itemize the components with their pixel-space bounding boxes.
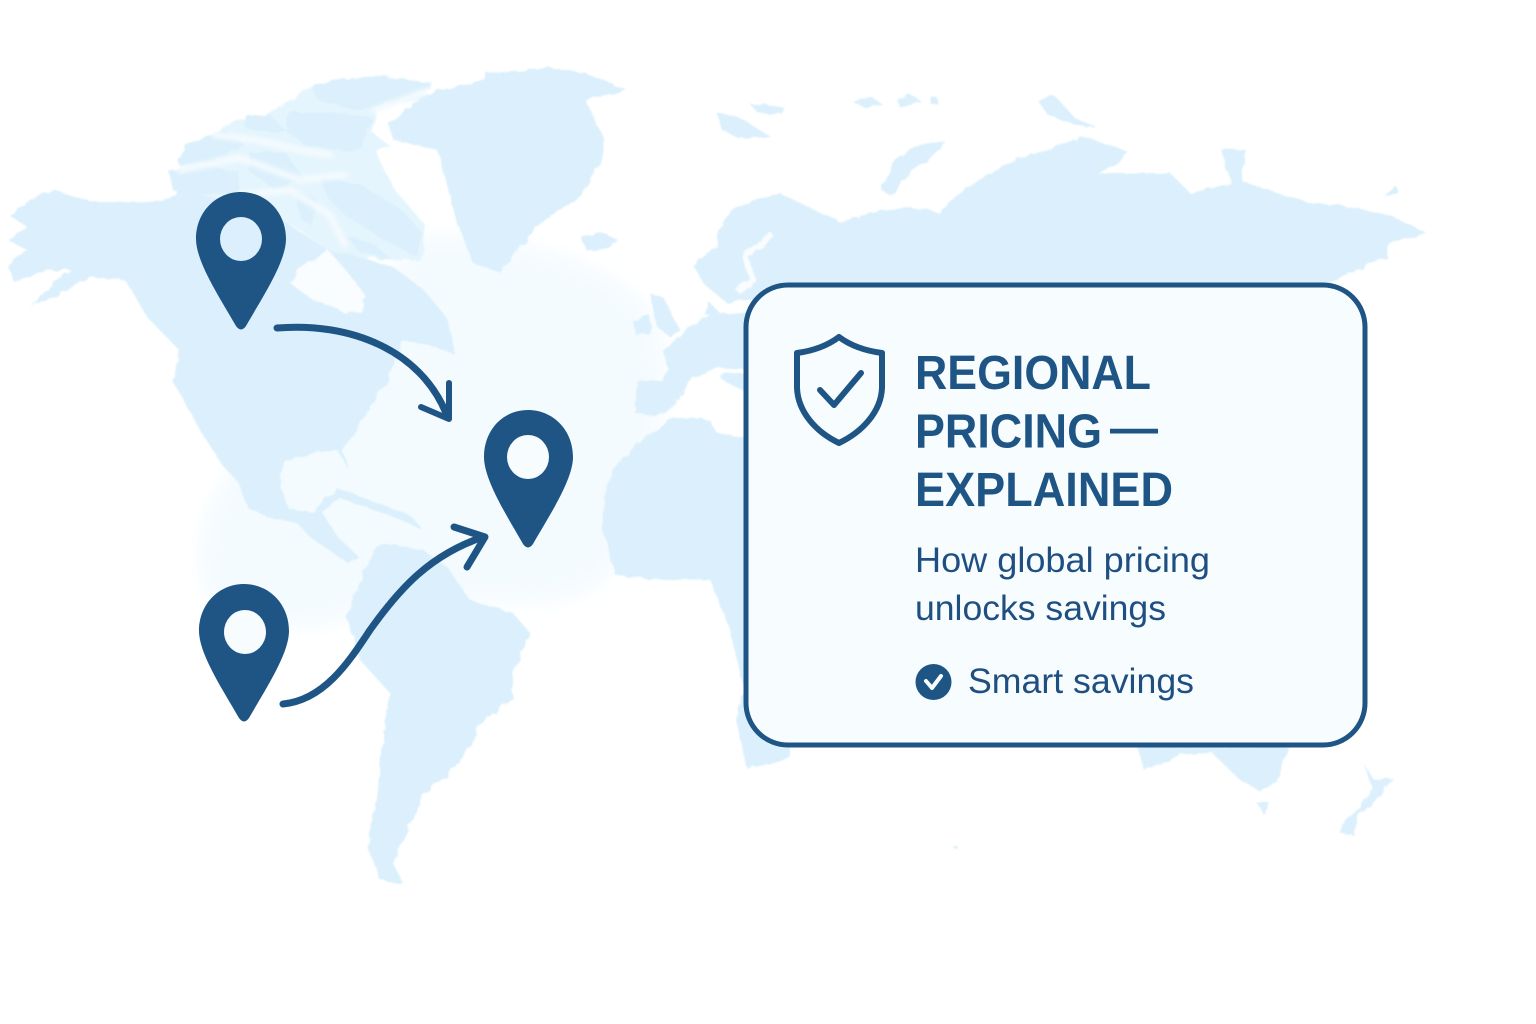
map: italy	[720, 372, 750, 394]
map: franz josef land	[853, 96, 883, 108]
heading: —	[1110, 402, 1158, 455]
heading: PRICING	[915, 406, 1102, 458]
subtitle	[915, 541, 1210, 628]
map: severnaya zemlya	[1037, 96, 1098, 128]
map: south america	[347, 543, 530, 883]
map: novaya zemlya	[881, 140, 945, 195]
map: new zealand	[1340, 763, 1394, 835]
pin: destination	[484, 410, 573, 548]
pin: south america	[199, 584, 289, 722]
map: great britain	[650, 293, 680, 337]
map: ireland	[633, 315, 650, 335]
badge: smart savings: Smart savings	[968, 662, 1194, 701]
arrow: north america to destination	[277, 327, 449, 419]
map: baltic cut	[738, 235, 773, 292]
heading	[915, 347, 1173, 517]
map: small speck	[952, 846, 958, 850]
map: continental europe	[635, 313, 750, 417]
map: greenland	[388, 68, 627, 273]
pin: north america	[196, 192, 286, 330]
icon: shield with check	[797, 337, 882, 443]
map: iceland	[582, 232, 618, 250]
map: arctic base	[172, 75, 433, 262]
map: eurasia	[692, 137, 1427, 303]
map: wrangel island	[1384, 186, 1400, 196]
panel: regional pricing card	[746, 285, 1365, 745]
atlantic glow	[200, 235, 665, 627]
map: africa	[602, 417, 790, 768]
map: arctic channels	[180, 92, 425, 245]
heading: REGIONAL	[915, 347, 1151, 400]
map: hudson bay cut	[290, 250, 366, 313]
subtitle: unlocks savings	[915, 589, 1166, 628]
map: arctic islands	[170, 77, 433, 260]
heading: EXPLAINED	[915, 464, 1173, 517]
map: denmark	[705, 300, 720, 315]
map: tasmania	[1256, 802, 1269, 815]
subtitle: How global pricing	[915, 541, 1210, 580]
map: north america	[8, 190, 455, 562]
map: australia	[1137, 746, 1287, 790]
map: svalbard	[716, 112, 772, 138]
world map	[8, 68, 1427, 883]
arrow: south america to destination	[283, 527, 485, 704]
